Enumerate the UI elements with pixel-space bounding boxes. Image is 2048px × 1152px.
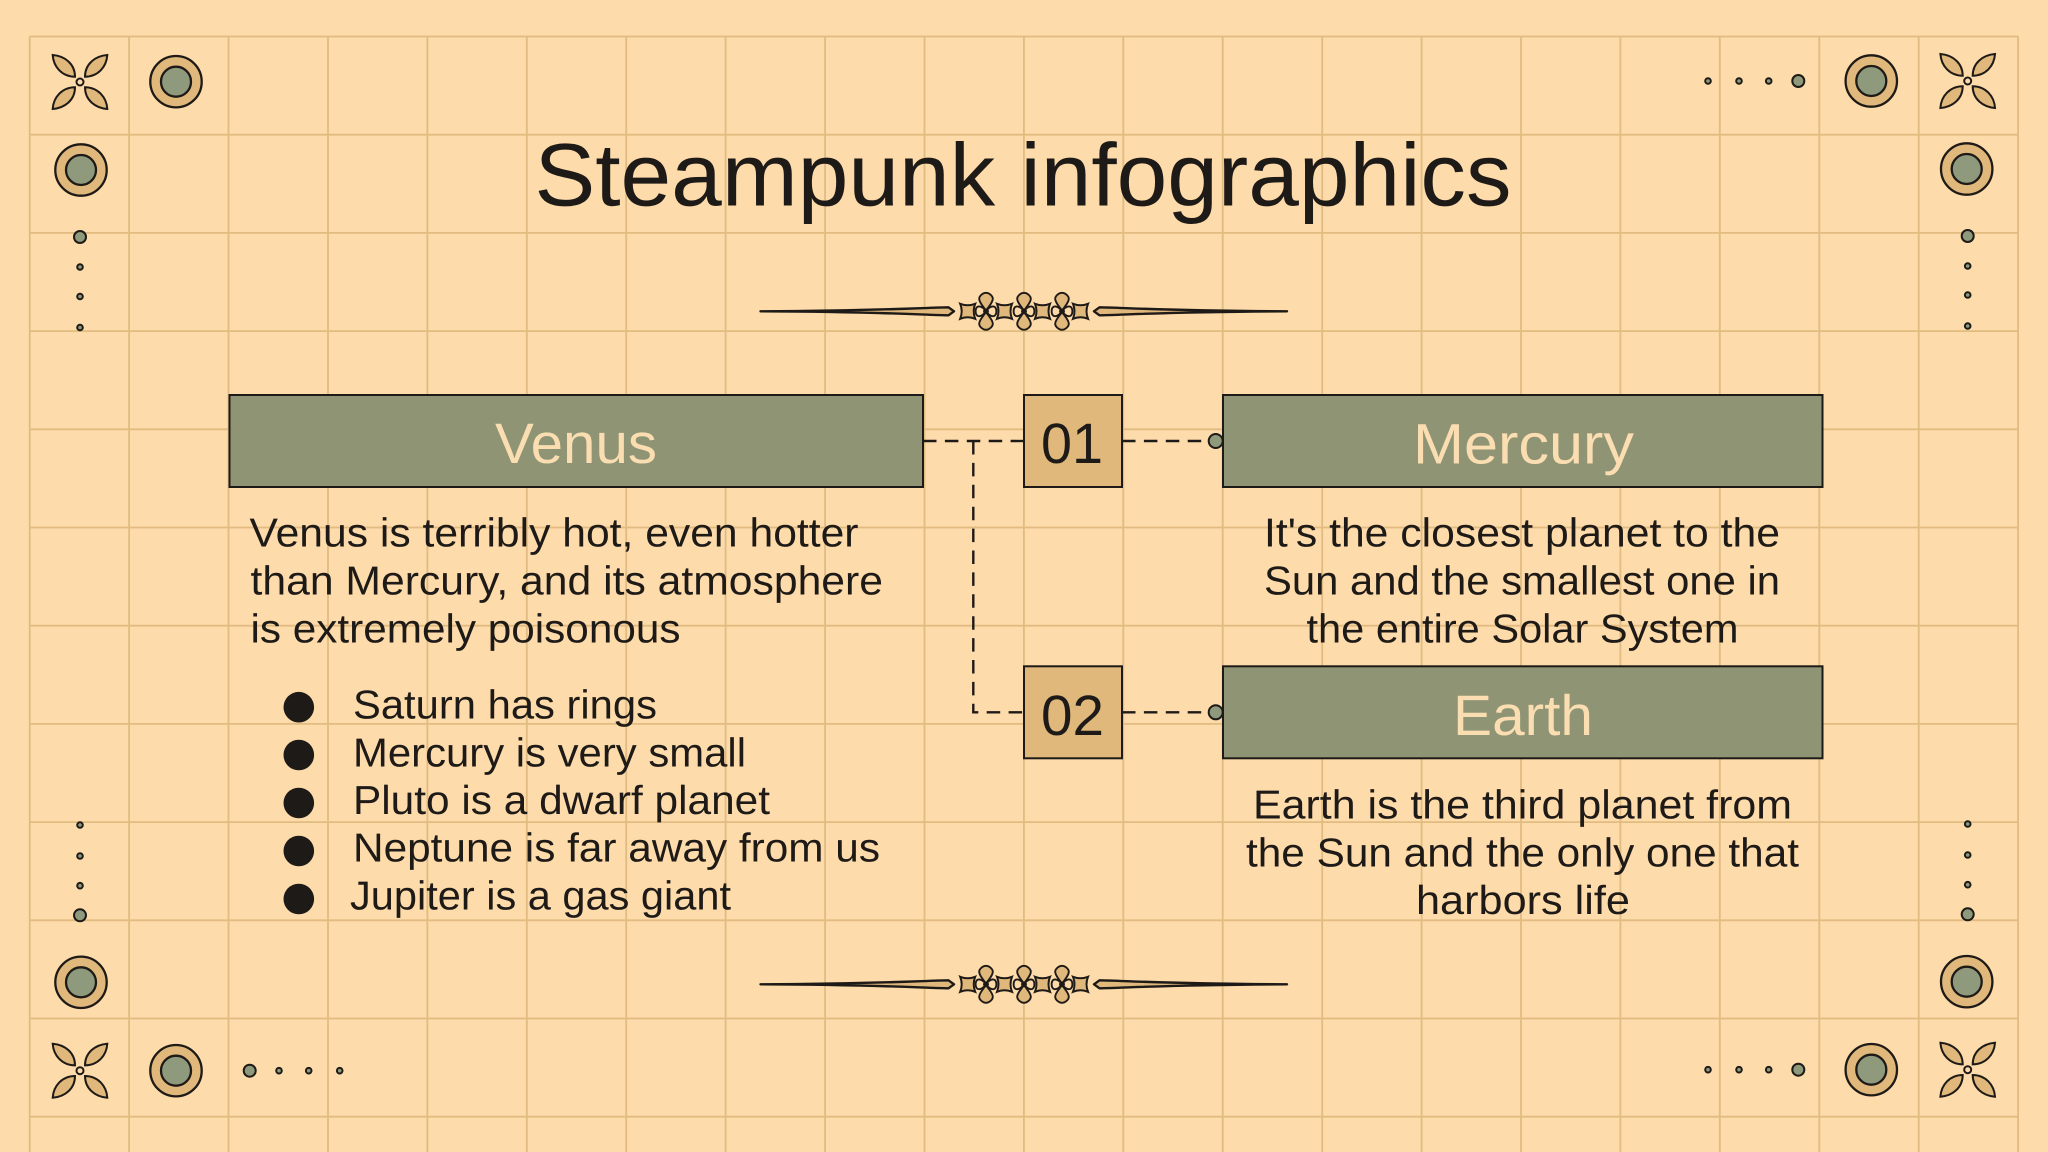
icon: flower (1940, 1043, 1995, 1097)
icon: gear ring (55, 144, 107, 196)
dotted row (244, 1065, 343, 1077)
heading bar: Mercury: Mercury (1413, 412, 1635, 476)
dotted row (1705, 75, 1804, 87)
dotted column (1962, 821, 1974, 920)
icon: gear ring (150, 1045, 202, 1096)
panel: Venus (230, 395, 923, 918)
text block: Venus description: than Mercury, and its atmosphere (250, 558, 883, 604)
dotted row (1705, 1064, 1804, 1076)
corner ornament: bottom left (53, 822, 343, 1098)
corner ornament: top left (53, 55, 202, 330)
text block: Earth description (1246, 781, 1799, 923)
bullet list: Saturn has rings (353, 682, 657, 728)
icon: gear ring (55, 957, 107, 1008)
heading bar: Earth: Earth (1453, 684, 1593, 748)
title: Steampunk infographics (534, 124, 1512, 224)
heading bar: Mercury (1223, 395, 1822, 487)
connector node: Earth (1209, 705, 1223, 719)
text block: Venus description: is extremely poisonous (250, 605, 680, 651)
bullet list: Mercury is very small (353, 729, 746, 775)
dotted column (1962, 230, 1974, 329)
bullet list: Neptune is far away from us (353, 825, 880, 871)
text block: Mercury description: Sun and the smallest one in (1264, 558, 1780, 604)
corner ornament: bottom right (1705, 821, 1995, 1097)
bullet list: Jupiter is a gas giant (350, 872, 731, 918)
icon: flower (1940, 54, 1995, 108)
panel: Mercury (1223, 395, 1822, 651)
text block: Venus description: Venus is terribly hot, even hotter (250, 510, 858, 556)
dashed connectors (923, 441, 1215, 712)
icon: gear ring (1941, 956, 1992, 1007)
icon: gear ring (1846, 55, 1897, 107)
text block: Mercury description: the entire Solar System (1306, 605, 1738, 651)
corner ornament: top right (1705, 54, 1995, 329)
panel: Earth (1223, 666, 1822, 923)
heading bar: Venus: Venus (495, 412, 657, 476)
heading bar: Venus (230, 395, 923, 487)
icon: gear ring (1941, 143, 1992, 195)
text block: Earth description: Earth is the third planet from (1253, 781, 1792, 827)
text block: Venus description (250, 510, 883, 651)
connector node: Mercury (1209, 434, 1223, 448)
dotted column (74, 822, 86, 921)
heading bar: Earth (1223, 666, 1822, 758)
icon: gear ring (150, 56, 202, 107)
number box: 01: 01 (1041, 412, 1103, 476)
icon: flower (53, 1044, 107, 1098)
text block: Earth description: the Sun and the only one that (1246, 829, 1799, 875)
icon: gear ring (1846, 1044, 1897, 1095)
number box: 02: 02 (1041, 684, 1104, 748)
icon: flower (53, 55, 107, 109)
bottom ornamental divider (760, 966, 1287, 1003)
number box: 01 (1024, 395, 1122, 487)
bullet list (284, 682, 880, 918)
top ornamental divider (760, 293, 1287, 330)
number box: 02 (1024, 666, 1122, 758)
text block: Mercury description: It's the closest planet to the (1264, 510, 1780, 556)
text block: Mercury description (1264, 510, 1780, 651)
bullet list: Pluto is a dwarf planet (353, 777, 770, 823)
dotted column (74, 231, 86, 330)
text block: Earth description: harbors life (1416, 877, 1630, 923)
